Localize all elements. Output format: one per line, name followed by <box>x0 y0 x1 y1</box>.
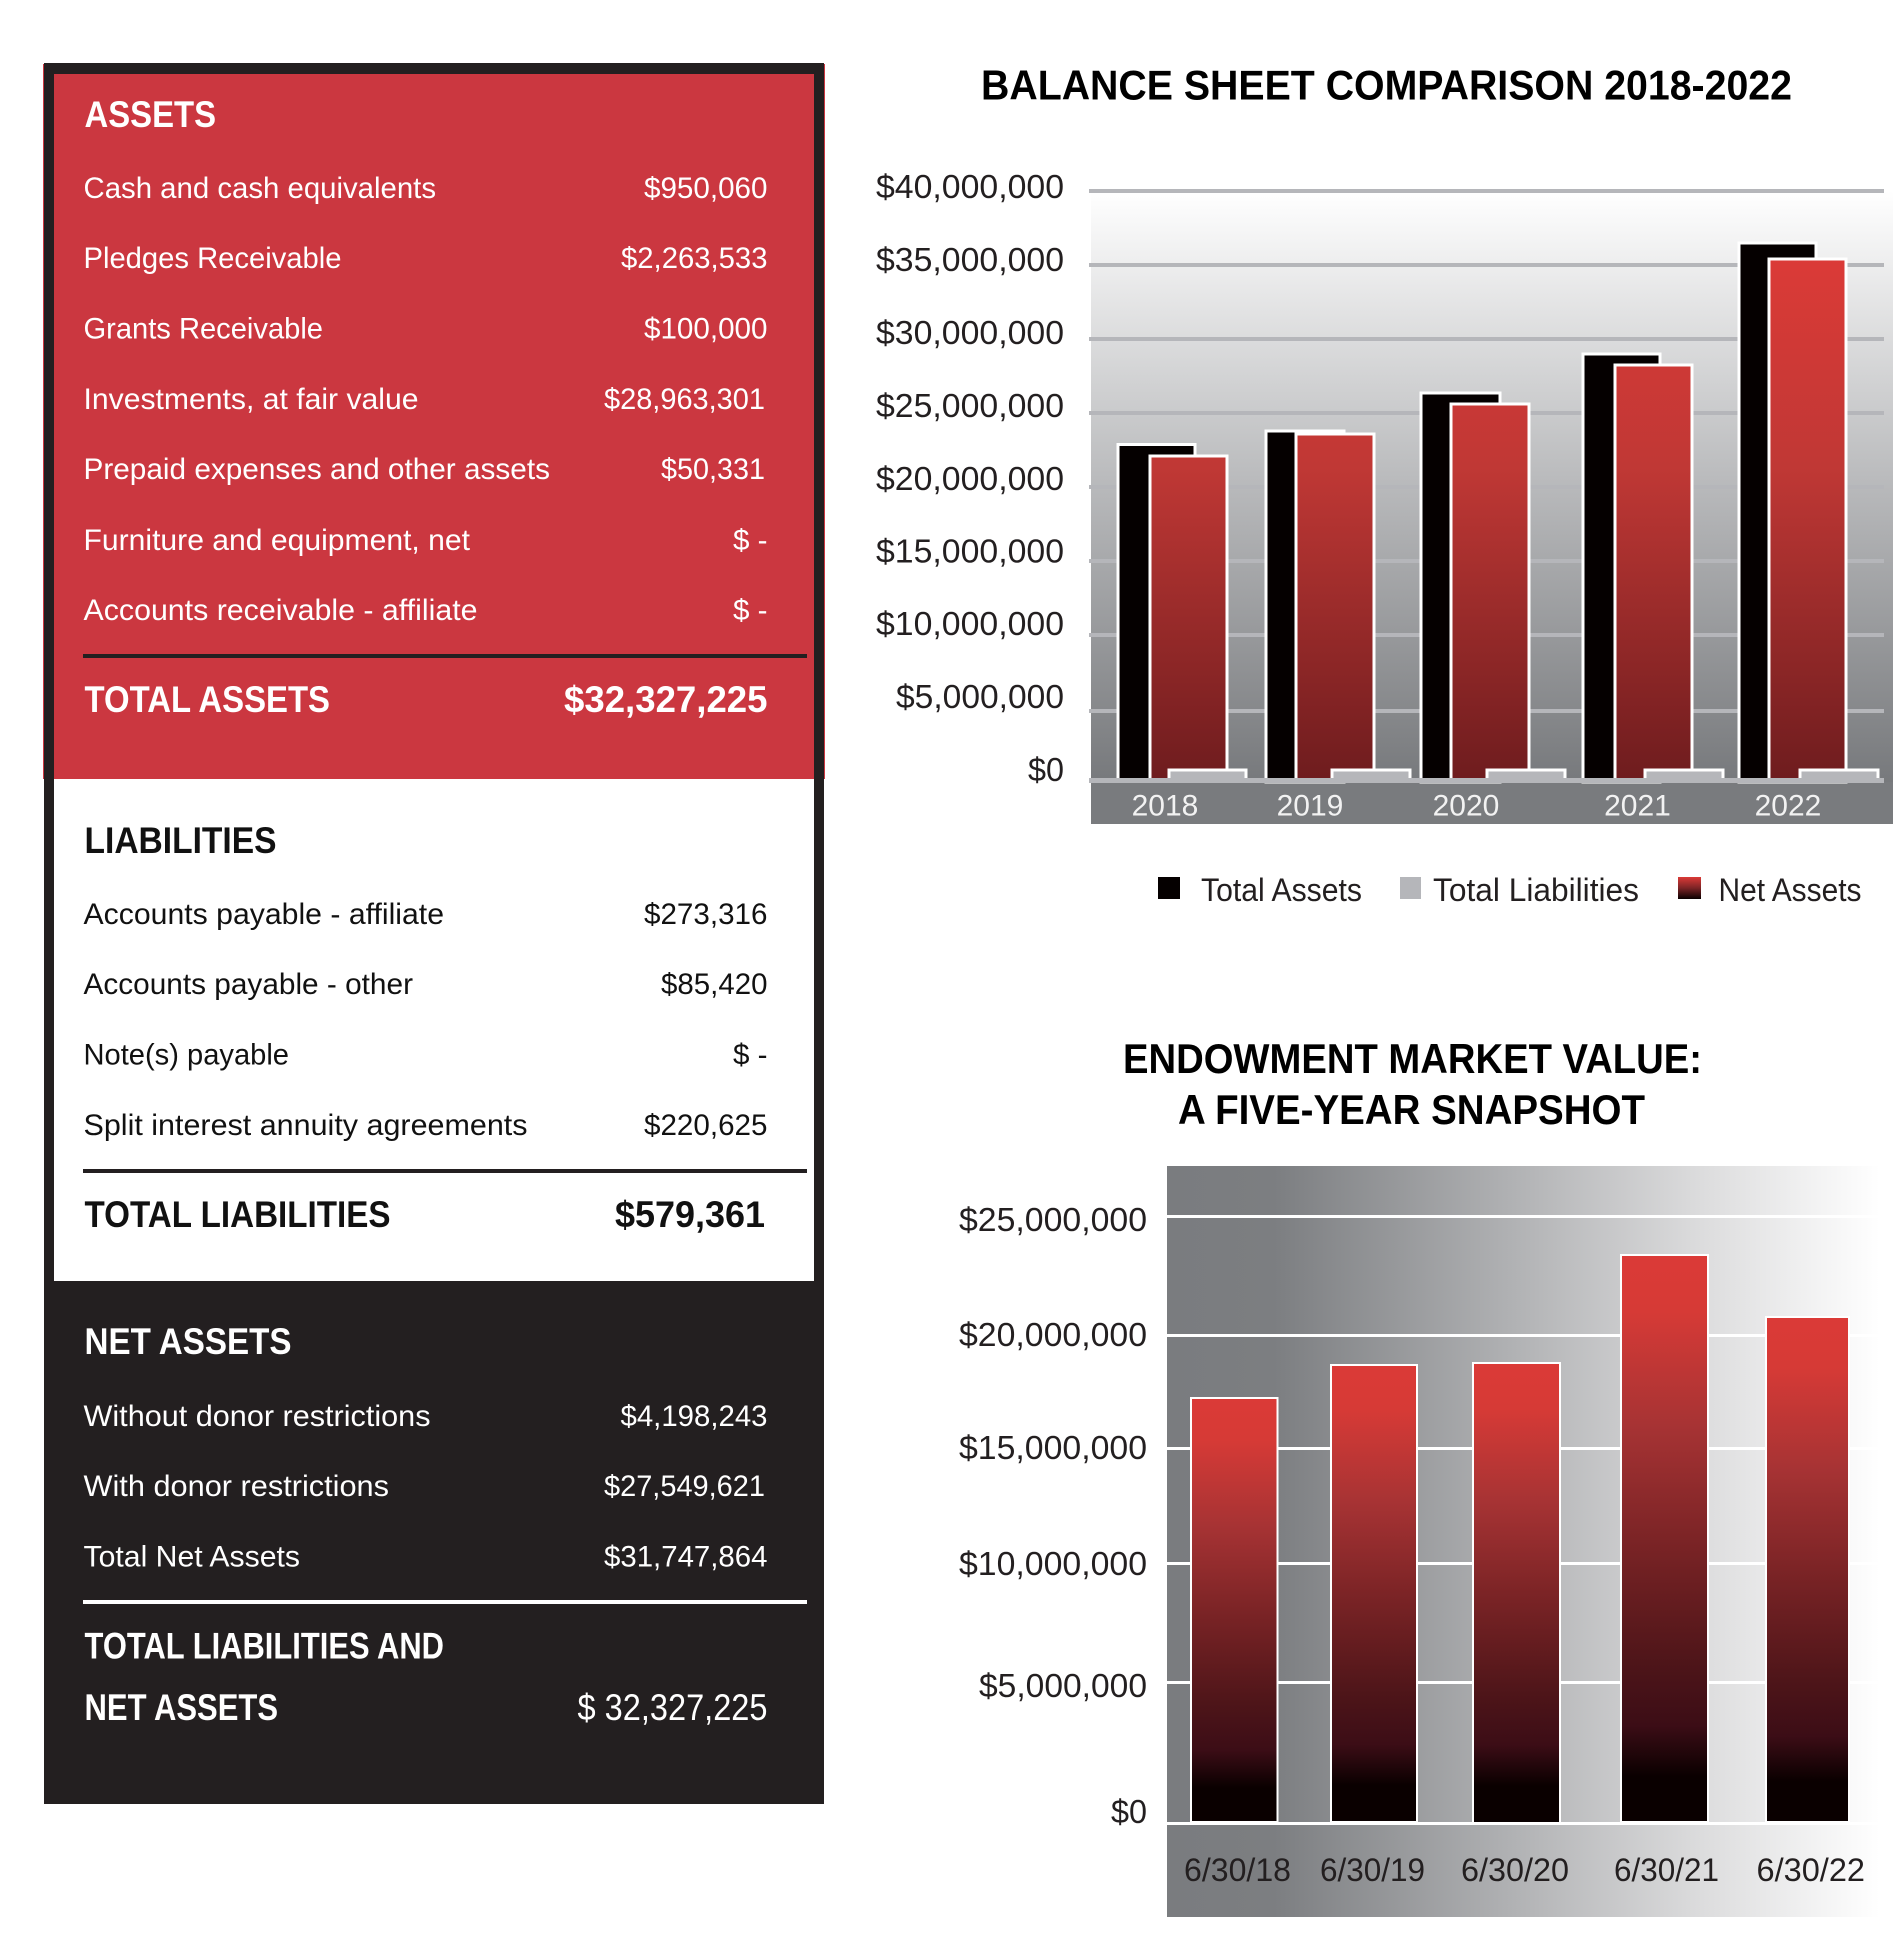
row: grants <box>84 313 768 346</box>
y axis labels: $20,000,000 <box>876 460 1064 497</box>
panel: liabilities <box>44 779 824 1281</box>
x axis labels: 6/30/22 <box>1756 1852 1865 1888</box>
y axis labels: $40,000,000 <box>876 168 1064 205</box>
heading: endowment market value <box>1123 1035 1702 1133</box>
x axis labels: 2018 <box>1132 790 1198 822</box>
row: total liabilities and net assets: TOTAL LIABILITIES AND <box>84 1626 444 1666</box>
y axis labels: $35,000,000 <box>876 241 1064 278</box>
y axis labels <box>959 1201 1147 1830</box>
row: grants: $100,000 <box>644 313 768 346</box>
row: accounts payable affiliate: Accounts payable - affiliate <box>84 898 444 931</box>
row: prepaid <box>84 453 765 486</box>
y axis labels: $30,000,000 <box>876 314 1064 351</box>
row: prepaid: $50,331 <box>661 453 765 486</box>
y axis labels: $15,000,000 <box>959 1429 1147 1466</box>
row: accounts receivable: $ - <box>733 594 768 627</box>
panel: assets <box>43 63 825 779</box>
row: accounts receivable: Accounts receivable - affiliate <box>84 594 478 627</box>
row: pledges: Pledges Receivable <box>84 242 342 275</box>
y axis labels: $5,000,000 <box>979 1667 1147 1704</box>
row: accounts payable other <box>84 968 768 1001</box>
chart: endowment market value <box>959 1166 1880 1917</box>
row: total liabilities <box>84 1194 765 1235</box>
x axis labels: 6/30/21 <box>1614 1852 1719 1888</box>
legend: Net Assets <box>1718 872 1862 908</box>
row: investments: $28,963,301 <box>604 383 765 416</box>
row: with donor restrictions: With donor restrictions <box>84 1470 389 1503</box>
bars: 2018 <box>1118 444 1246 782</box>
row: total liabilities: $579,361 <box>615 1194 765 1235</box>
chart: balance sheet comparison <box>876 168 1893 824</box>
row: total liabilities and net assets <box>84 1626 768 1728</box>
row: without donor restrictions: $4,198,243 <box>620 1400 768 1433</box>
row: without donor restrictions: Without donor restrictions <box>84 1400 430 1433</box>
row: total assets: $32,327,225 <box>564 679 768 720</box>
row: split interest: $220,625 <box>644 1109 768 1142</box>
heading: liabilities: LIABILITIES <box>84 820 276 861</box>
row: cash <box>84 172 768 205</box>
y axis labels: $0 <box>1111 1793 1147 1830</box>
bars: 2019 <box>1266 431 1410 782</box>
y axis labels: $20,000,000 <box>959 1316 1147 1353</box>
row: total liabilities: TOTAL LIABILITIES <box>84 1194 390 1235</box>
row: total assets: TOTAL ASSETS <box>84 679 330 720</box>
row: with donor restrictions: $27,549,621 <box>604 1470 765 1503</box>
x axis labels: 2022 <box>1755 790 1821 822</box>
y axis labels: $5,000,000 <box>896 678 1064 715</box>
row: accounts payable affiliate <box>84 898 768 931</box>
bars: 2022 <box>1739 243 1878 782</box>
y axis labels: $10,000,000 <box>959 1545 1147 1582</box>
y axis labels <box>876 168 1064 788</box>
row: total net assets: $31,747,864 <box>604 1540 768 1574</box>
row: split interest: Split interest annuity agreements <box>84 1109 528 1142</box>
heading: net assets: NET ASSETS <box>84 1321 292 1362</box>
row: pledges: $2,263,533 <box>621 242 768 275</box>
y axis labels: $15,000,000 <box>876 533 1064 570</box>
row: furniture: $ - <box>733 524 768 557</box>
row: total liabilities and net assets: NET ASSETS <box>84 1687 278 1728</box>
bars: 2020 <box>1421 393 1565 782</box>
y axis labels: $10,000,000 <box>876 605 1064 642</box>
row: accounts receivable <box>84 594 768 627</box>
panel: balance sheet table <box>43 63 825 1804</box>
x axis labels: 2021 <box>1604 790 1671 822</box>
legend: Total Liabilities <box>1433 872 1639 908</box>
row: split interest <box>84 1109 768 1142</box>
bars: 2021 <box>1583 354 1723 782</box>
row: accounts payable other: Accounts payable - other <box>84 968 413 1001</box>
legend: Total Assets <box>1201 872 1362 908</box>
x axis labels: 6/30/20 <box>1461 1852 1569 1888</box>
row: investments: Investments, at fair value <box>84 383 418 416</box>
row: accounts payable other: $85,420 <box>661 968 768 1001</box>
row: total net assets <box>84 1540 768 1574</box>
row: accounts payable affiliate: $273,316 <box>644 898 768 931</box>
y axis labels: $0 <box>1028 751 1064 788</box>
row: total net assets: Total Net Assets <box>84 1540 300 1574</box>
row: total liabilities and net assets: $ 32,327,225 <box>578 1687 768 1728</box>
bars: endowment <box>1191 1255 1849 1823</box>
x axis labels: 2020 <box>1433 790 1499 822</box>
row: notes payable: $ - <box>733 1038 768 1072</box>
row: without donor restrictions <box>84 1400 768 1433</box>
x axis labels <box>1132 790 1821 822</box>
row: investments <box>84 383 765 416</box>
x axis labels <box>1184 1852 1865 1888</box>
heading: endowment market value: A FIVE-YEAR SNAPSHOT <box>1178 1086 1645 1133</box>
row: prepaid: Prepaid expenses and other assets <box>84 453 550 486</box>
x axis labels: 6/30/19 <box>1320 1852 1425 1888</box>
row: pledges <box>84 242 768 275</box>
row: notes payable <box>84 1038 768 1072</box>
row: with donor restrictions <box>84 1470 765 1503</box>
row: cash: $950,060 <box>644 172 768 205</box>
row: furniture <box>84 524 768 557</box>
row: furniture: Furniture and equipment, net <box>84 524 471 557</box>
heading: balance sheet comparison: BALANCE SHEET COMPARISON 2018-2022 <box>981 62 1792 108</box>
row: grants: Grants Receivable <box>84 313 323 346</box>
x axis labels: 2019 <box>1277 790 1343 822</box>
x axis labels: 6/30/18 <box>1184 1852 1291 1888</box>
heading: endowment market value: ENDOWMENT MARKET VALUE: <box>1123 1035 1702 1082</box>
panel: net assets <box>44 1281 824 1804</box>
row: total assets <box>84 679 768 720</box>
row: cash: Cash and cash equivalents <box>84 172 436 205</box>
heading: assets: ASSETS <box>84 94 216 135</box>
y axis labels: $25,000,000 <box>876 387 1064 424</box>
row: notes payable: Note(s) payable <box>84 1038 289 1072</box>
legend <box>1158 872 1862 908</box>
y axis labels: $25,000,000 <box>959 1201 1147 1238</box>
